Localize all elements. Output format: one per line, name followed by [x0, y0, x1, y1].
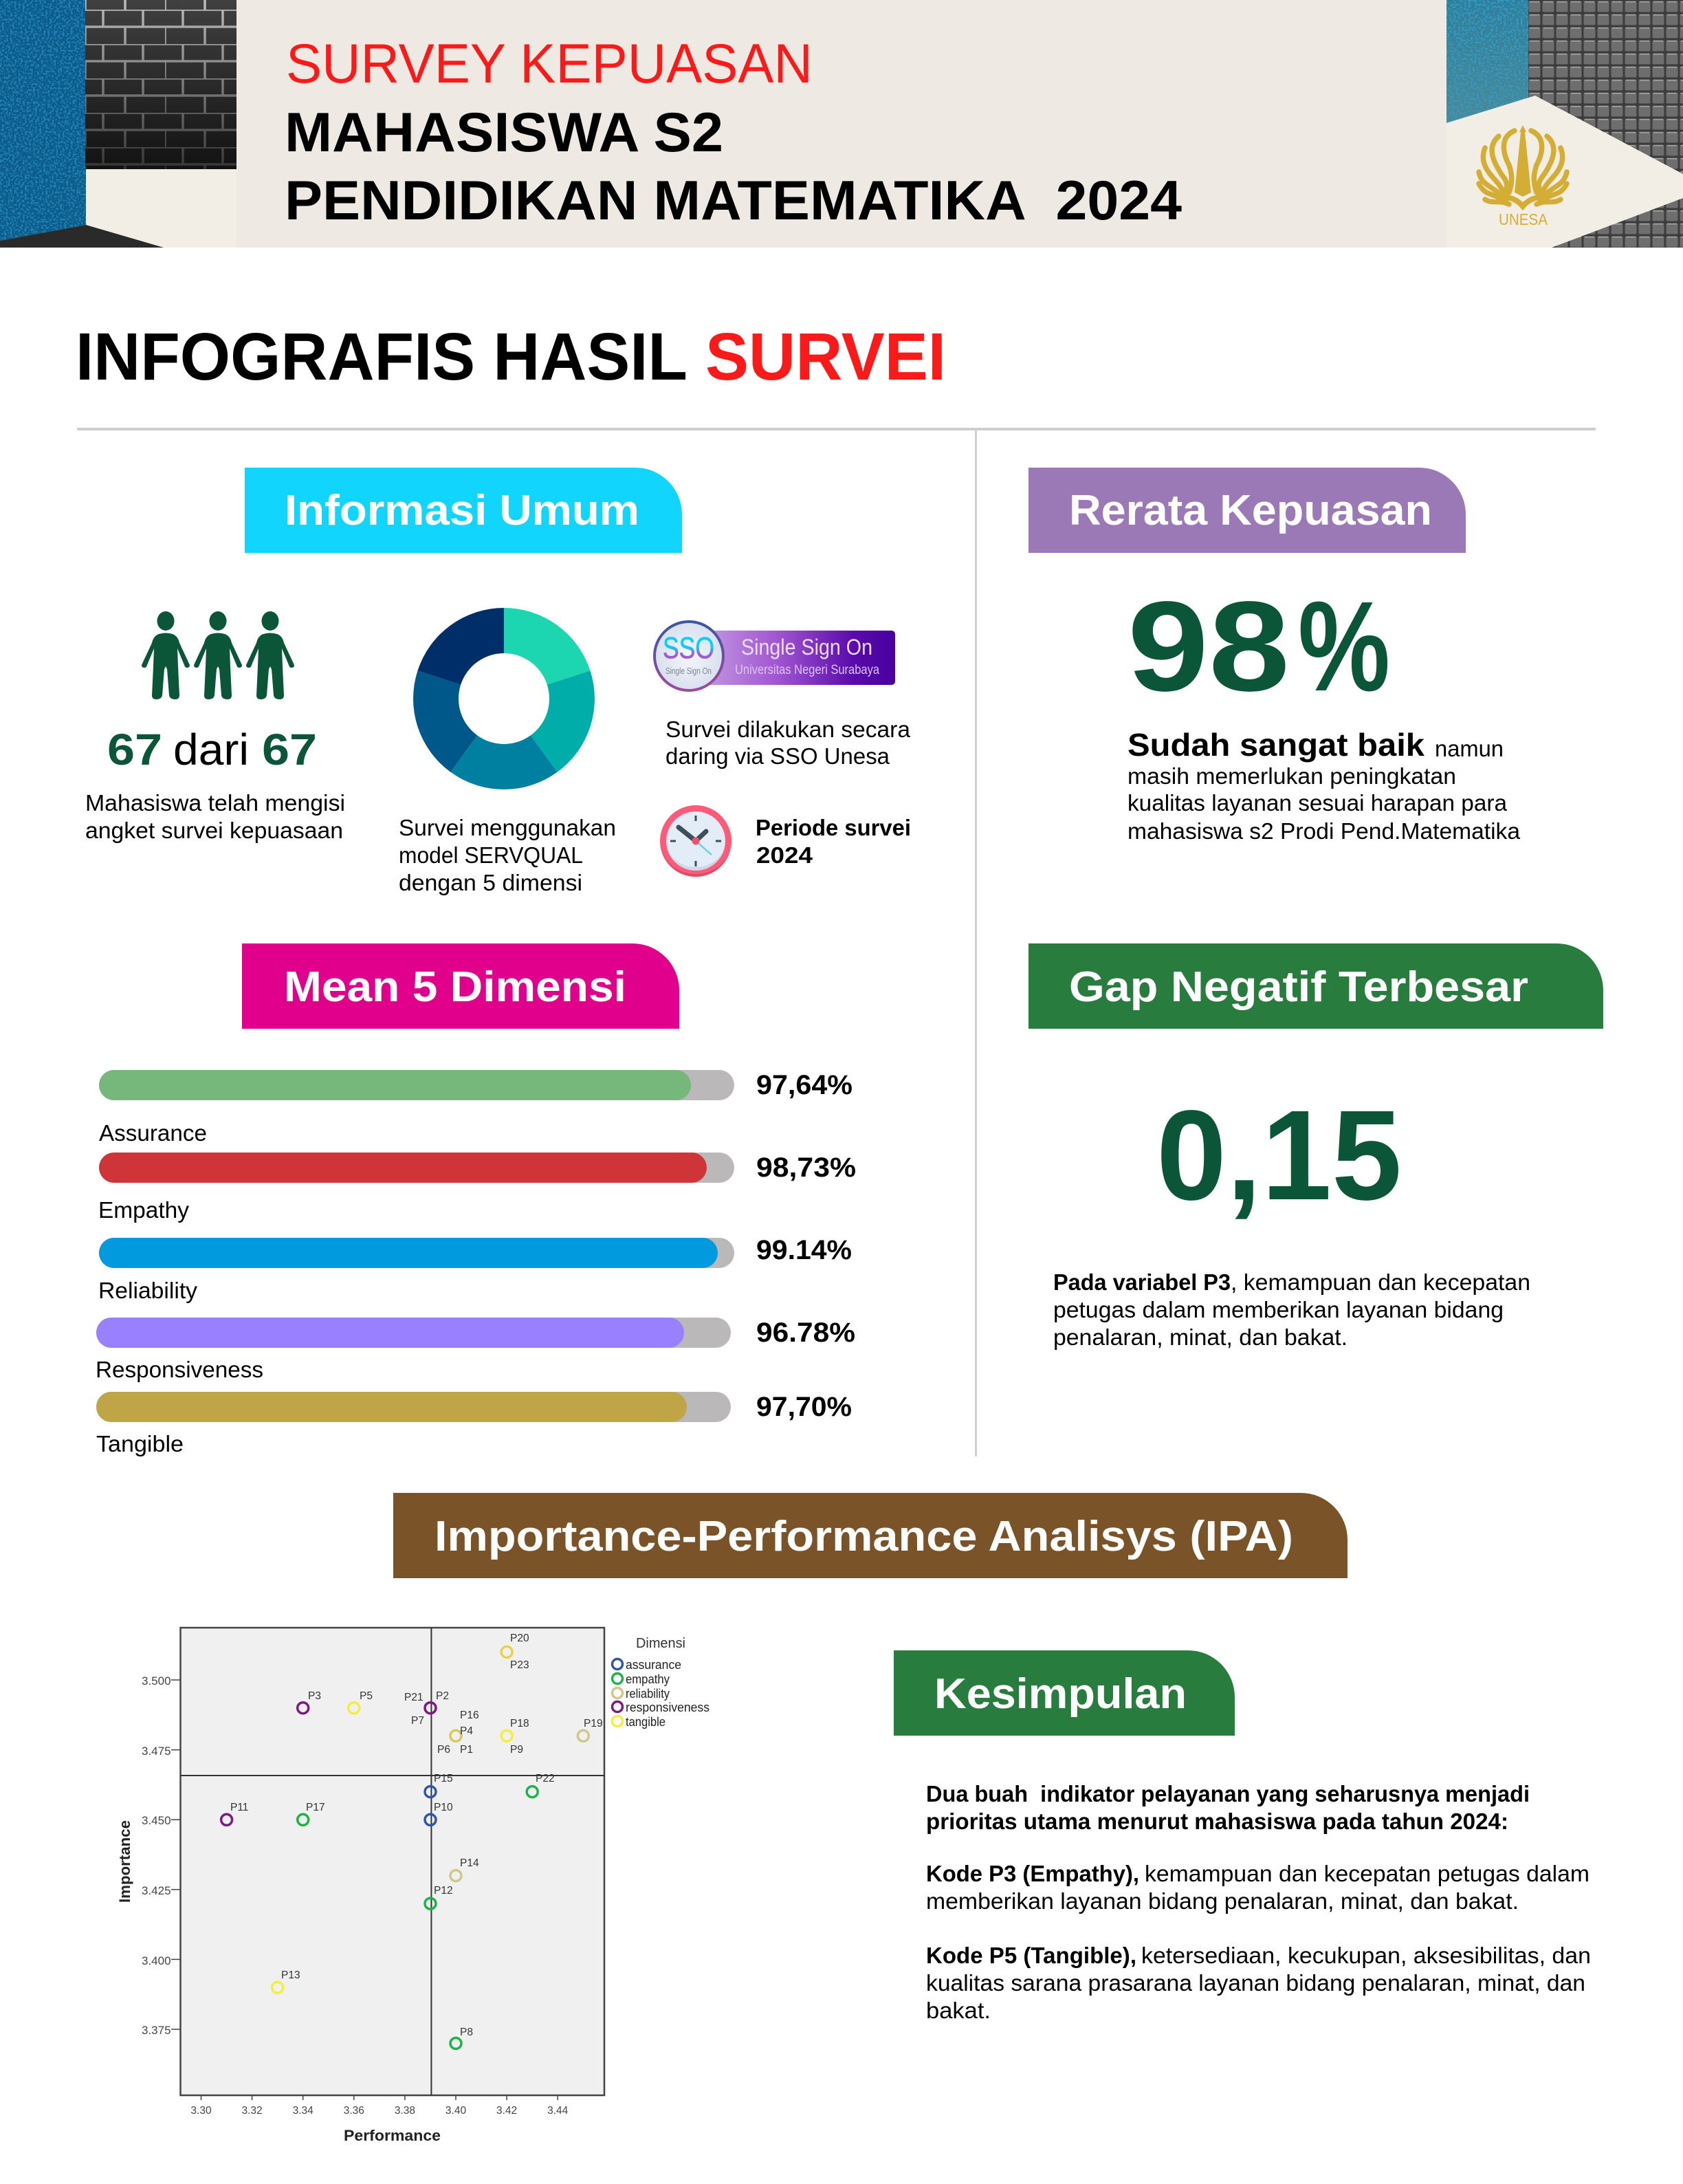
banner title: PENDIDIKAN MATEMATIKA 2024 — [285, 170, 1182, 232]
point labels: P1 — [460, 1744, 473, 1756]
text: gap description: penalaran, minat, dan bakat. — [1053, 1324, 1348, 1350]
point labels: P23 — [510, 1659, 529, 1671]
panel: kesimpulan — [894, 1650, 1591, 2023]
x axis tick labels — [190, 2105, 569, 2117]
heading pill: kesimpulan — [894, 1650, 1235, 1736]
banner title: SURVEY KEPUASAN — [286, 33, 813, 95]
bar: reliability: Reliability — [98, 1278, 198, 1303]
heading pill: importance performance analysis: Importance-Performance Analisys (IPA) — [434, 1513, 1293, 1560]
point labels: P19 — [584, 1718, 603, 1729]
bar: responsiveness: 96.78% — [756, 1318, 855, 1348]
header banner — [0, 0, 1683, 248]
panel: mean 5 dimensi — [96, 943, 856, 1456]
x axis tick labels: 3.34 — [293, 2105, 314, 2117]
point labels: P8 — [460, 2027, 473, 2038]
text: kode P5 — [926, 1943, 1591, 2023]
x axis tick labels: 3.42 — [496, 2105, 517, 2117]
text: respondents — [85, 790, 345, 843]
text: periode survei — [756, 815, 911, 868]
y axis tick labels: 3.450 — [142, 1814, 171, 1827]
legend: assurance — [626, 1658, 681, 1672]
point labels: P4 — [460, 1725, 473, 1737]
text: rerata description: kualitas layanan sesuai harapan para — [1128, 790, 1508, 816]
panel: informasi umum — [85, 468, 911, 895]
right grey mesh texture — [1528, 0, 1683, 248]
right cream shape — [1446, 96, 1683, 248]
y axis tick labels: 3.375 — [142, 2024, 171, 2037]
text: kode P5: bakat. — [926, 1998, 991, 2023]
heading pill: informasi umum — [245, 468, 682, 553]
text: kode P3 — [926, 1861, 1590, 1914]
x axis tick labels: 3.36 — [344, 2105, 364, 2117]
point labels: P12 — [434, 1885, 453, 1897]
legend: tangible — [626, 1715, 666, 1729]
left blue textured panel — [0, 0, 86, 241]
text: kode P3: kemampuan dan kecepatan petugas dalam — [1145, 1861, 1590, 1886]
point labels: P6 — [437, 1744, 450, 1756]
heading pill: kesimpulan: Kesimpulan — [934, 1670, 1187, 1718]
icon: single sign on badge: Universitas Negeri Surabaya — [735, 663, 879, 677]
point labels: P18 — [510, 1718, 529, 1729]
banner title: MAHASISWA S2 — [285, 102, 723, 164]
heading pill: informasi umum: Informasi Umum — [285, 487, 639, 534]
bar: reliability — [98, 1235, 852, 1303]
point labels: P5 — [360, 1690, 373, 1702]
stat: 67 dari 67 — [107, 725, 317, 774]
bar: empathy — [98, 1153, 856, 1223]
text: respondents: angket survei kepuasaan — [85, 818, 343, 843]
bar: responsiveness — [96, 1318, 855, 1382]
bar: responsiveness: Responsiveness — [96, 1357, 263, 1382]
point labels: P13 — [281, 1969, 300, 1981]
y axis tick labels: 3.400 — [142, 1954, 171, 1967]
x axis title: Performance — [344, 2127, 441, 2144]
text: servqual — [399, 815, 616, 895]
bar: assurance: 97,64% — [756, 1070, 852, 1100]
text: sso: daring via SSO Unesa — [666, 743, 890, 769]
icon: single sign on badge: SSO — [663, 631, 714, 665]
text: rerata description — [1128, 727, 1521, 844]
x axis tick labels: 3.44 — [547, 2105, 569, 2117]
text: servqual: Survei menggunakan — [399, 815, 616, 840]
icon: single sign on badge: Single Sign On — [741, 635, 872, 659]
stat: 98 percent: % — [1298, 576, 1390, 718]
legend: Dimensi — [636, 1636, 685, 1651]
y axis tick labels: 3.425 — [142, 1884, 171, 1897]
bar: empathy: 98,73% — [756, 1153, 856, 1183]
text: kode P5: ketersediaan, kecukupan, aksesibilitas, dan — [1141, 1943, 1591, 1968]
heading pill: rerata kepuasan — [1028, 468, 1466, 553]
stat: gap value: 0,15 — [1156, 1084, 1402, 1227]
x axis tick labels: 3.40 — [446, 2105, 466, 2117]
chart: donut five dimensions — [413, 608, 595, 789]
stat: 67 dari 67: 67 — [107, 725, 162, 774]
text: rerata description: mahasiswa s2 Prodi Pend.Matematika — [1128, 818, 1521, 844]
stat: 98 percent: 98 — [1128, 576, 1290, 718]
panel: rerata kepuasan — [1028, 468, 1521, 844]
text: sso: Survei dilakukan secara — [666, 717, 911, 742]
main heading: INFOGRAFIS HASIL — [76, 319, 688, 394]
stat: 98 percent — [1128, 576, 1390, 718]
icon: clock — [660, 805, 732, 877]
logo tower — [1515, 125, 1531, 197]
text: periode survei: 2024 — [756, 842, 813, 868]
banner title — [285, 33, 1182, 232]
point labels: P10 — [434, 1802, 453, 1813]
text: rerata description: Sudah sangat baik — [1128, 727, 1424, 763]
stat: 67 dari 67: dari — [173, 725, 249, 774]
legend — [612, 1636, 710, 1729]
bar: tangible — [96, 1392, 852, 1456]
x axis tick labels: 3.30 — [190, 2105, 212, 2117]
icon: single sign on badge: Single Sign On — [666, 666, 712, 676]
icon: UNESA logo — [1479, 125, 1567, 228]
point labels: P22 — [536, 1773, 555, 1784]
legend: reliability — [626, 1687, 670, 1701]
left brick texture — [85, 0, 236, 169]
point labels: P14 — [460, 1857, 479, 1869]
point labels: P16 — [460, 1710, 479, 1721]
point labels: P11 — [230, 1802, 248, 1813]
heading pill: rerata kepuasan: Rerata Kepuasan — [1069, 487, 1432, 534]
x axis tick labels: 3.38 — [395, 2105, 415, 2117]
panel: gap negatif terbesar — [1028, 943, 1603, 1350]
text: gap description — [1053, 1269, 1530, 1350]
text: rerata description: namun — [1435, 736, 1504, 761]
text: servqual: model SERVQUAL — [399, 842, 583, 868]
y axis tick labels: 3.500 — [142, 1674, 171, 1688]
heading pill: gap negatif terbesar — [1028, 943, 1603, 1029]
y axis tick labels — [142, 1674, 171, 2037]
text: gap description: Pada variabel P3 — [1053, 1269, 1231, 1295]
text: kode P5: Kode P5 (Tangible), — [926, 1943, 1136, 1968]
heading pill: importance performance analysis — [393, 1493, 1348, 1578]
heading pill: mean 5 dimensi — [242, 943, 679, 1029]
text: rerata description: masih memerlukan peningkatan — [1128, 763, 1456, 789]
plot area — [180, 1628, 604, 2095]
point labels: P21 — [404, 1692, 424, 1703]
text: gap description: petugas dalam memberikan layanan bidang — [1053, 1297, 1504, 1322]
point labels: P9 — [510, 1744, 523, 1756]
text: servqual: dengan 5 dimensi — [399, 870, 582, 895]
legend: empathy — [626, 1672, 670, 1686]
text: kode P3: memberikan layanan bidang penalaran, minat, dan bakat. — [926, 1888, 1519, 1914]
scatter points — [221, 1646, 588, 2049]
bar: empathy: Empathy — [98, 1197, 189, 1223]
stat: 67 dari 67: 67 — [262, 725, 317, 774]
main heading: SURVEI — [705, 319, 946, 394]
chart: IPA scatter plot — [116, 1628, 710, 2144]
icon: three people — [142, 611, 294, 699]
bar: tangible: Tangible — [96, 1431, 184, 1456]
heading pill: gap negatif terbesar: Gap Negatif Terbesar — [1069, 963, 1528, 1011]
heading pill: mean 5 dimensi: Mean 5 Dimensi — [284, 963, 626, 1011]
text: kode P5: kualitas sarana prasarana layanan bidang penalaran, minat, dan — [926, 1970, 1585, 1996]
bar: reliability: 99.14% — [756, 1235, 852, 1265]
left dark corner — [0, 225, 164, 248]
text: kode P3: Kode P3 (Empathy), — [926, 1861, 1139, 1886]
point labels: P15 — [434, 1773, 453, 1784]
y axis tick labels: 3.475 — [142, 1745, 171, 1758]
bar: assurance: Assurance — [99, 1120, 207, 1146]
bar: tangible: 97,70% — [756, 1392, 852, 1422]
text: intro: prioritas utama menurut mahasiswa pada tahun 2024: — [926, 1809, 1508, 1834]
logo wordmark: UNESA — [1499, 210, 1548, 228]
left cream shape — [86, 169, 236, 248]
text: intro — [926, 1781, 1530, 1834]
point labels: P17 — [306, 1802, 325, 1813]
x axis tick labels: 3.32 — [242, 2105, 263, 2117]
legend: responsiveness — [626, 1701, 710, 1714]
point labels: P7 — [411, 1715, 424, 1727]
right teal textured panel — [1446, 0, 1536, 124]
text: gap description: , kemampuan dan kecepatan — [1231, 1269, 1530, 1295]
bar: assurance — [99, 1070, 852, 1146]
text: sso — [666, 717, 911, 769]
point labels: P2 — [436, 1690, 449, 1702]
point labels — [230, 1632, 603, 2038]
y axis title: Importance — [116, 1820, 133, 1903]
point labels: P20 — [510, 1632, 529, 1644]
point labels: P3 — [308, 1690, 321, 1702]
icon: single sign on badge — [654, 622, 895, 690]
text: periode survei: Periode survei — [756, 815, 911, 840]
text: intro: Dua buah indikator pelayanan yang seharusnya menjadi — [926, 1781, 1530, 1806]
text: respondents: Mahasiswa telah mengisi — [85, 790, 345, 816]
